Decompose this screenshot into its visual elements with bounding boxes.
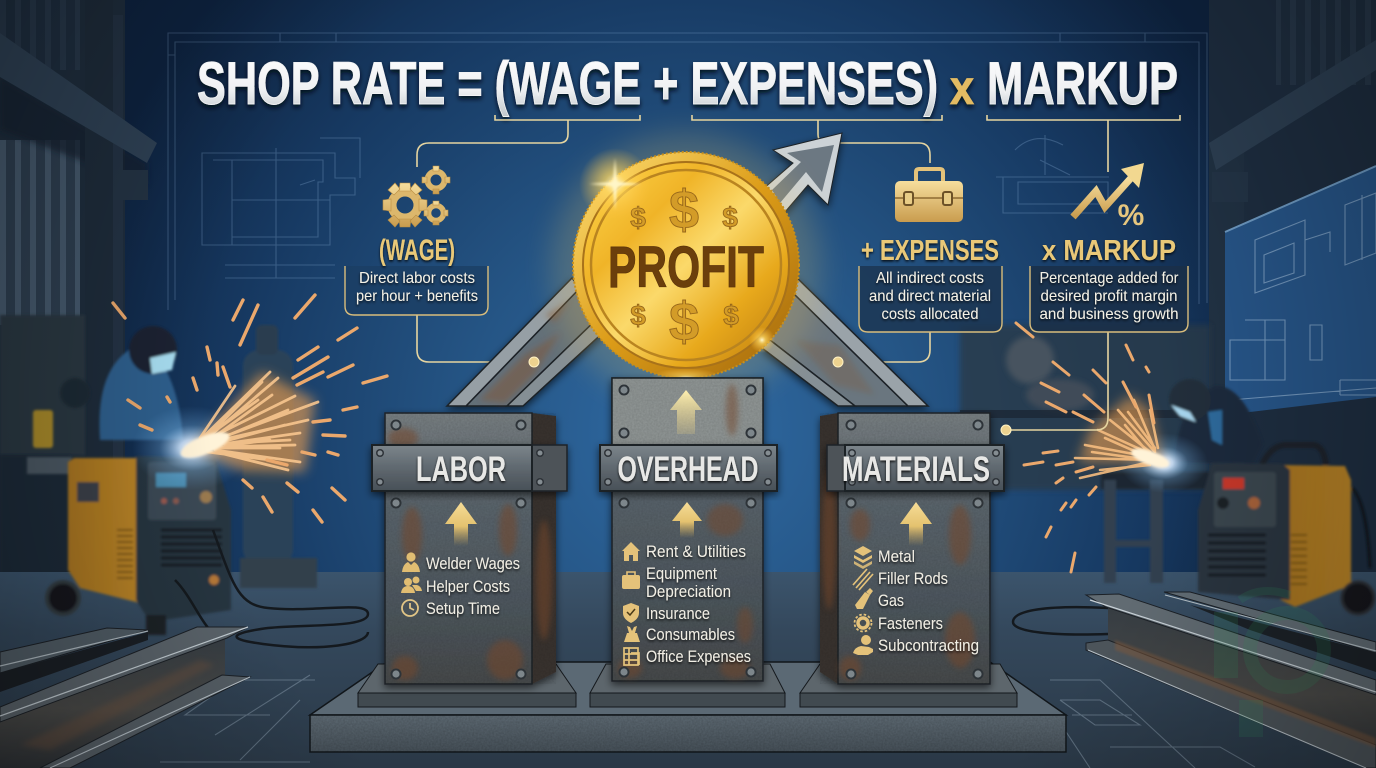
coin dollar marks: $ — [630, 202, 646, 233]
panel: wage — [345, 234, 488, 315]
left I-beams — [0, 627, 250, 768]
icon: shield — [623, 603, 639, 623]
labor base plate — [358, 664, 576, 707]
pillar: materials — [800, 413, 1017, 707]
icon: consumables — [624, 626, 640, 642]
right welding machine — [1198, 445, 1374, 614]
labor pillar body — [385, 413, 556, 684]
coin sparkle — [579, 148, 775, 388]
watermark: green P logo — [1226, 591, 1324, 737]
icon: gas torch — [855, 588, 873, 609]
coin dollar marks: $ — [669, 180, 699, 240]
gas bottle — [240, 325, 317, 588]
labor band — [372, 445, 567, 491]
materials arrow — [900, 502, 932, 546]
materials texture — [820, 413, 990, 684]
wage heading: (WAGE) — [379, 234, 455, 267]
materials list: Filler Rods — [878, 569, 948, 588]
icon: welder — [402, 552, 420, 572]
connector: markup bracket to markup block — [987, 115, 1180, 430]
concrete foundation — [310, 662, 1066, 752]
labor label: LABOR — [416, 450, 506, 489]
wage description: per hour + benefits — [356, 288, 478, 305]
arrow: rising steel arrow behind coin — [762, 133, 842, 212]
overhead list: Depreciation — [646, 582, 731, 601]
labor rivets — [390, 420, 526, 680]
overhead arrow — [672, 502, 702, 538]
labor list: Welder Wages — [426, 554, 520, 573]
labor arrow — [445, 502, 477, 546]
icon: building — [624, 648, 639, 665]
materials list — [853, 546, 979, 655]
markup description: and business growth — [1040, 306, 1178, 323]
overhead list: Rent & Utilities — [646, 542, 746, 561]
pillar: labor — [358, 413, 576, 707]
expenses description: All indirect costs — [876, 270, 984, 287]
expenses description: costs allocated — [882, 306, 978, 323]
icon: fastener — [854, 614, 872, 632]
materials rust patches — [822, 470, 975, 680]
title: shop rate formula: SHOP RATE = (WAGE + EXPENSES) — [197, 50, 938, 117]
coin dollar marks — [630, 180, 739, 352]
left welder — [99, 326, 183, 440]
welding cables right — [1013, 607, 1108, 634]
icon: stacked sheets — [854, 546, 872, 569]
connector dots — [529, 357, 1011, 435]
background: right wall and roof — [960, 0, 1376, 575]
coin dollar marks: $ — [723, 300, 739, 331]
icon: markup trend arrow with percent — [1073, 163, 1144, 232]
icon: handshake — [853, 635, 873, 655]
materials rivets — [846, 420, 984, 680]
title: shop rate formula: MARKUP — [987, 50, 1178, 117]
overhead upper arrow — [670, 390, 702, 434]
overhead rivets — [618, 384, 756, 678]
overhead rust patches — [618, 384, 753, 679]
floor — [0, 572, 1376, 768]
left welding sparks — [113, 295, 387, 522]
labor list: Setup Time — [426, 599, 500, 618]
icon: helpers — [401, 576, 422, 593]
background: left wall and roof — [0, 0, 157, 575]
icon: toolcase — [622, 572, 640, 589]
icon: gears — [383, 166, 450, 227]
icon: toolbox — [895, 169, 963, 222]
icon: markup trend arrow with percent: % — [1118, 199, 1144, 232]
left welding machine — [47, 456, 231, 635]
right workbench — [1101, 472, 1211, 583]
wage description — [356, 270, 478, 305]
beam: left roof support — [447, 278, 608, 406]
overhead list: Insurance — [646, 604, 710, 623]
right welder — [1169, 379, 1263, 464]
overhead band — [600, 445, 777, 491]
connector: expenses bracket to expenses block — [692, 115, 942, 362]
coin text: profit: PROFIT — [608, 235, 764, 300]
beam: right roof support with arrow — [762, 276, 928, 406]
overhead list: Equipment — [646, 564, 717, 583]
materials list: Gas — [878, 591, 904, 610]
coin: profit — [573, 152, 799, 378]
pillar: overhead — [590, 378, 785, 707]
overhead list: Consumables — [646, 625, 735, 644]
panel: markup — [1030, 235, 1188, 332]
icon: house — [622, 542, 640, 561]
overhead texture — [612, 378, 763, 681]
title: shop rate formula: x — [950, 62, 974, 115]
markup description — [1040, 270, 1179, 323]
connector: wage bracket to wage block — [417, 115, 640, 362]
overhead base plate — [590, 664, 785, 707]
right welding sparks — [1016, 323, 1208, 572]
materials base plate — [800, 664, 1017, 707]
materials list: Metal — [878, 547, 915, 566]
coin dollar marks: $ — [630, 300, 646, 331]
overhead list — [622, 542, 751, 666]
floor blueprint lines — [160, 675, 1255, 768]
expenses description — [869, 270, 991, 323]
labor rust patches — [388, 428, 552, 680]
materials list: Subcontracting — [878, 636, 979, 655]
icon: filler rods — [853, 569, 873, 590]
materials pillar body — [820, 413, 990, 684]
expenses heading: + EXPENSES — [861, 235, 999, 267]
markup description: Percentage added for — [1040, 270, 1179, 287]
labor list: Helper Costs — [426, 577, 510, 596]
wage description: Direct labor costs — [359, 270, 475, 287]
expenses description: and direct material — [869, 288, 991, 305]
labor texture — [385, 413, 556, 684]
coin dollar marks: $ — [669, 292, 699, 352]
overhead label: OVERHEAD — [618, 450, 758, 489]
coin dollar marks: $ — [722, 202, 738, 233]
materials label: MATERIALS — [842, 450, 990, 489]
background: blueprint linework — [168, 33, 1207, 310]
icon: clock — [402, 600, 418, 616]
markup heading: x MARKUP — [1042, 235, 1176, 267]
coin glow — [551, 133, 821, 403]
markup description: desired profit margin — [1040, 288, 1178, 305]
overhead pillar body — [612, 378, 763, 681]
welding cables left — [175, 530, 368, 647]
right I-beams — [1086, 592, 1376, 768]
background: right blueprint board — [1225, 166, 1376, 415]
labor list — [401, 552, 520, 618]
panel: expenses — [859, 235, 1002, 332]
materials band — [827, 445, 1004, 491]
materials list: Fasteners — [878, 614, 943, 633]
overhead list: Office Expenses — [646, 647, 751, 666]
